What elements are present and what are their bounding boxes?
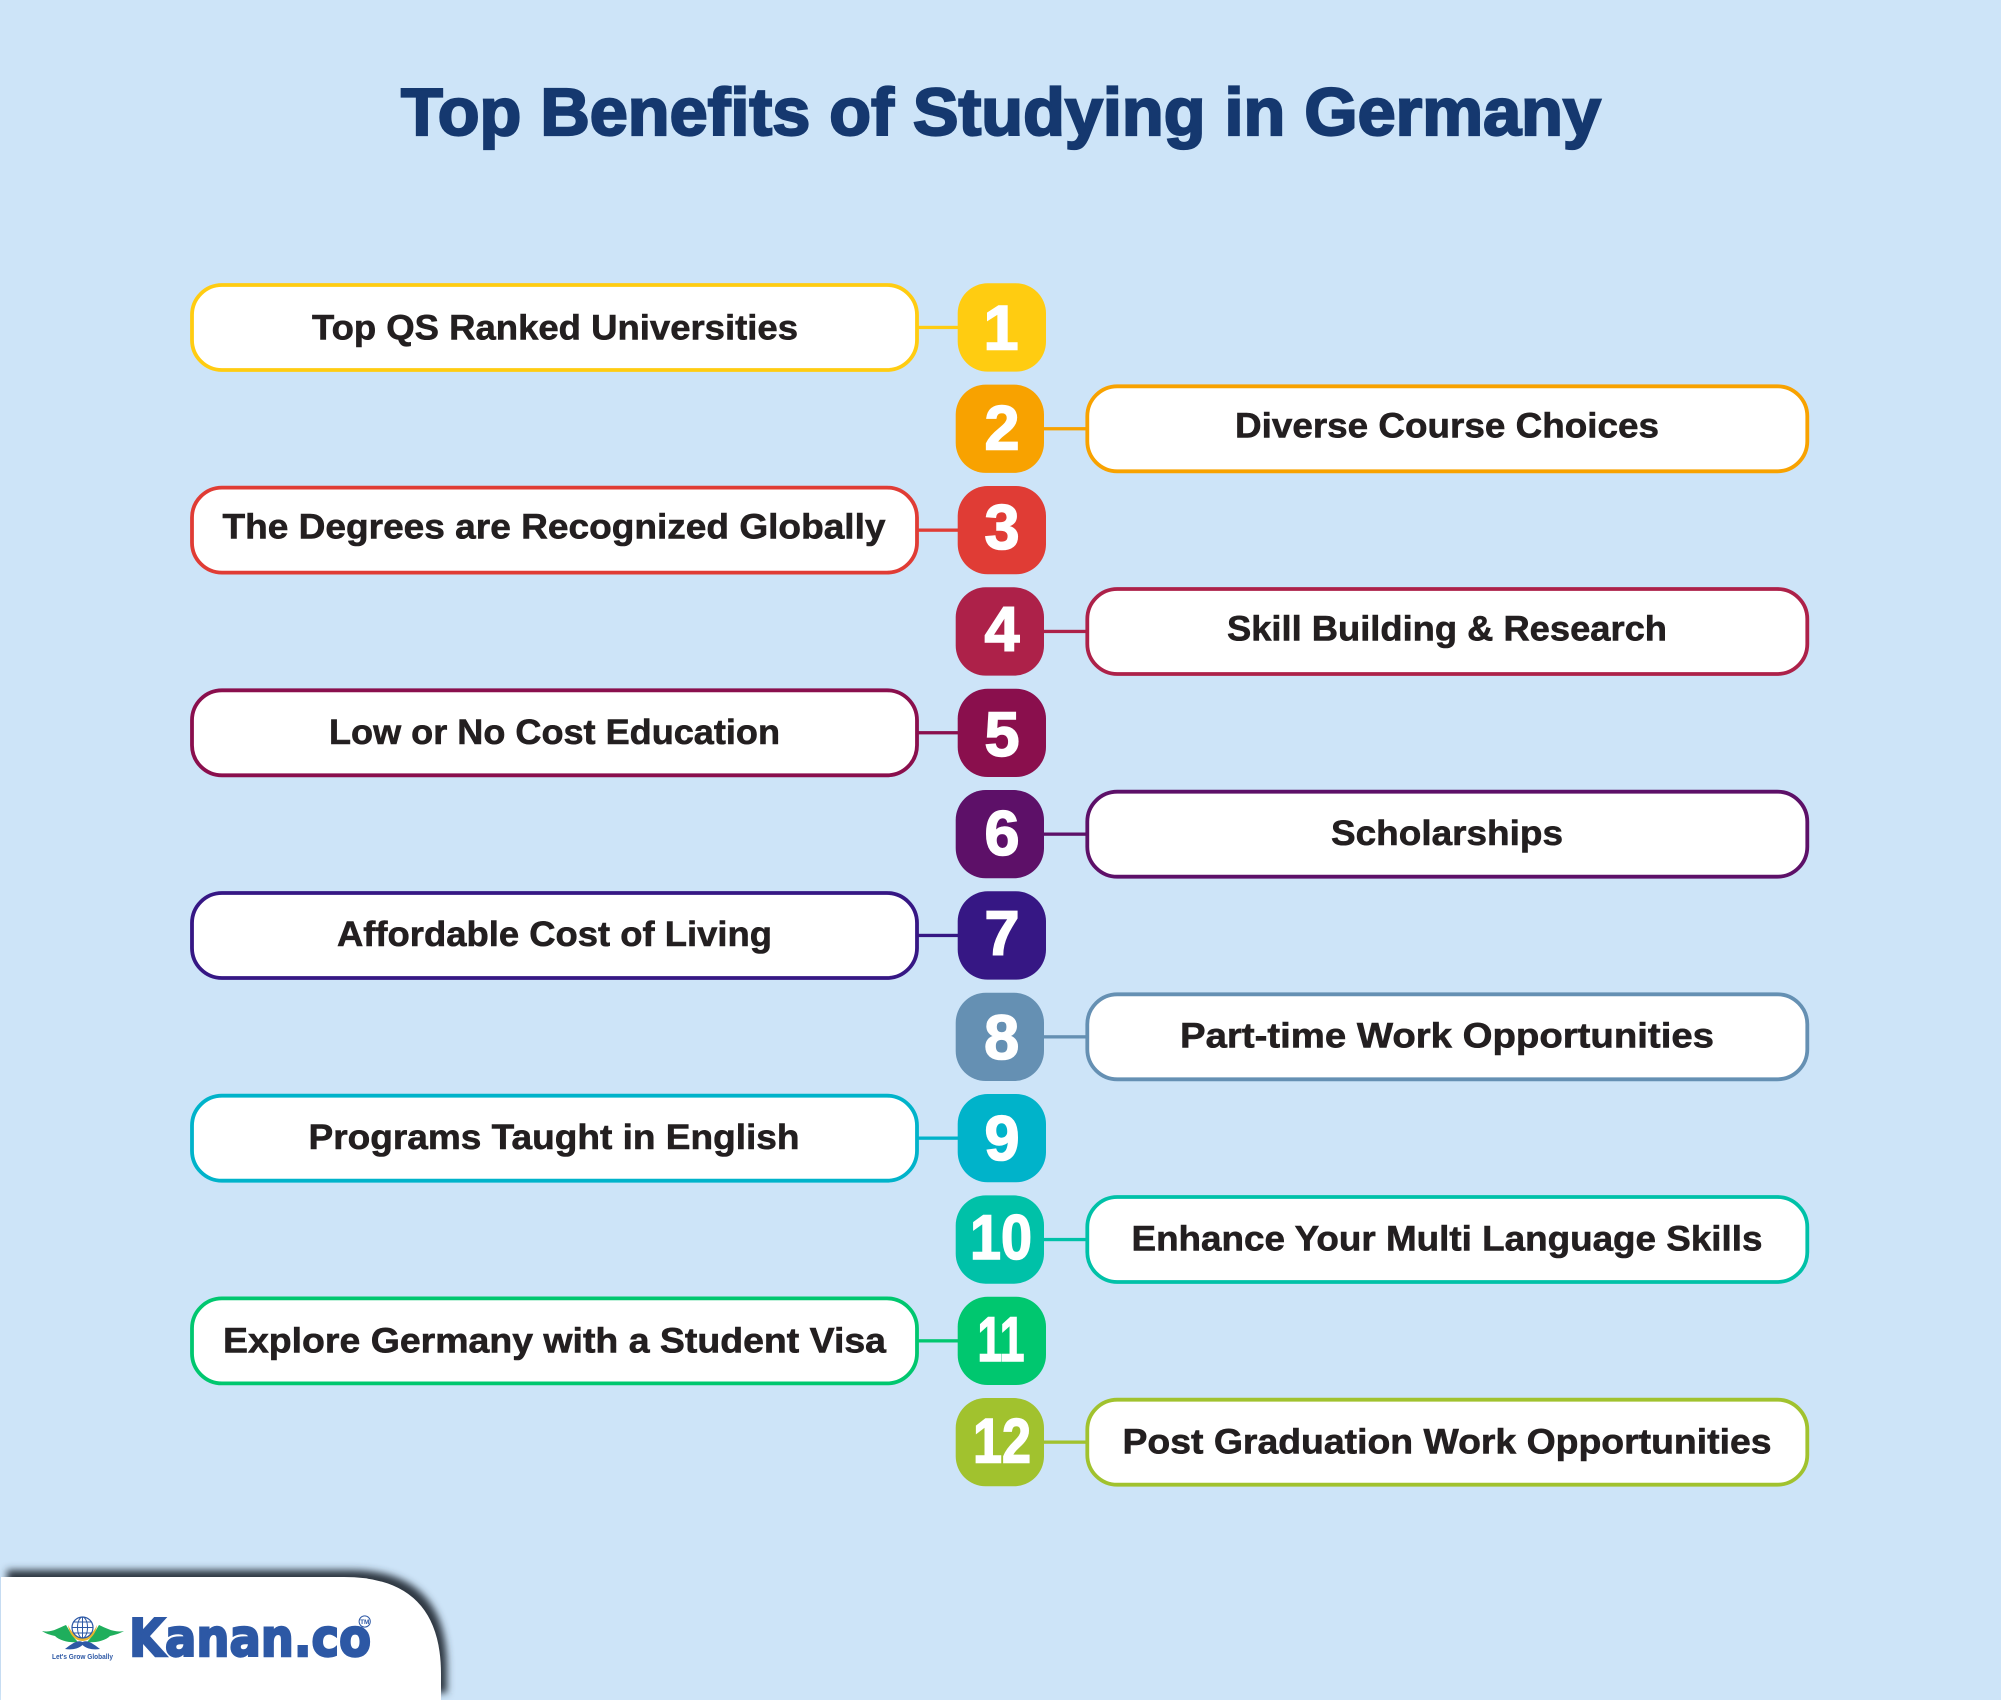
- item 1: Top QS Ranked Universities: [192, 283, 1046, 372]
- item 8: Part-time Work Opportunities: 8: [984, 1003, 1019, 1073]
- item 11: Explore Germany with a Student Visa: [192, 1297, 1046, 1385]
- item 7: Affordable Cost of Living: 7: [984, 899, 1020, 969]
- logo panel: [1, 1570, 447, 1700]
- item 4: Skill Building & Research: [956, 587, 1807, 676]
- item 1: Top QS Ranked Universities: 1: [983, 293, 1019, 363]
- item 2: Diverse Course Choices: [956, 385, 1807, 473]
- item 9: Programs Taught in English: Programs Taught in English: [308, 1117, 800, 1157]
- item 8: Part-time Work Opportunities: [956, 993, 1807, 1081]
- item 1: Top QS Ranked Universities: Top QS Ranked Universities: [312, 308, 798, 348]
- item 2: Diverse Course Choices: 2: [984, 393, 1020, 463]
- item 11: Explore Germany with a Student Visa: Explore Germany with a Student Visa: [223, 1320, 887, 1360]
- item 12: Post Graduation Work Opportunities: [956, 1398, 1807, 1486]
- item 2: Diverse Course Choices: Diverse Course Choices: [1235, 406, 1659, 446]
- item 10: Enhance Your Multi Language Skills: Enhance Your Multi Language Skills: [1132, 1219, 1762, 1259]
- trademark symbol: [359, 1616, 370, 1627]
- item 3: The Degrees are Recognized Globally: [192, 486, 1046, 574]
- item 5: Low or No Cost Education: 5: [984, 700, 1020, 770]
- item 3: The Degrees are Recognized Globally: 3: [984, 493, 1020, 563]
- logo tagline: Let's Grow Globally: [52, 1652, 114, 1661]
- item 6: Scholarships: Scholarships: [1331, 813, 1563, 853]
- title: Top Benefits of Studying in Germany: [401, 75, 1601, 150]
- item 4: Skill Building & Research: 4: [984, 595, 1020, 665]
- logo wordmark: Kanan.co: [129, 1609, 371, 1669]
- item 8: Part-time Work Opportunities: Part-time Work Opportunities: [1180, 1016, 1714, 1056]
- item 7: Affordable Cost of Living: Affordable Cost of Living: [337, 914, 772, 954]
- item 5: Low or No Cost Education: Low or No Cost Education: [329, 712, 780, 752]
- icon: globe with wings logo: [42, 1617, 124, 1649]
- item 6: Scholarships: [956, 790, 1807, 878]
- item 9: Programs Taught in English: 9: [984, 1104, 1020, 1174]
- item 6: Scholarships: 6: [984, 799, 1020, 869]
- item 12: Post Graduation Work Opportunities: Post Graduation Work Opportunities: [1122, 1422, 1772, 1462]
- item 10: Enhance Your Multi Language Skills: [956, 1195, 1807, 1284]
- item 12: Post Graduation Work Opportunities: 12: [973, 1407, 1031, 1477]
- item 5: Low or No Cost Education: [192, 689, 1046, 777]
- item 10: Enhance Your Multi Language Skills: 10: [970, 1203, 1032, 1273]
- item 7: Affordable Cost of Living: [192, 891, 1046, 980]
- item 3: The Degrees are Recognized Globally: The Degrees are Recognized Globally: [222, 506, 886, 546]
- item 9: Programs Taught in English: [192, 1094, 1046, 1182]
- item 11: Explore Germany with a Student Visa: 11: [978, 1305, 1024, 1375]
- trademark symbol: TM: [360, 1619, 369, 1626]
- item 4: Skill Building & Research: Skill Building & Research: [1227, 608, 1667, 648]
